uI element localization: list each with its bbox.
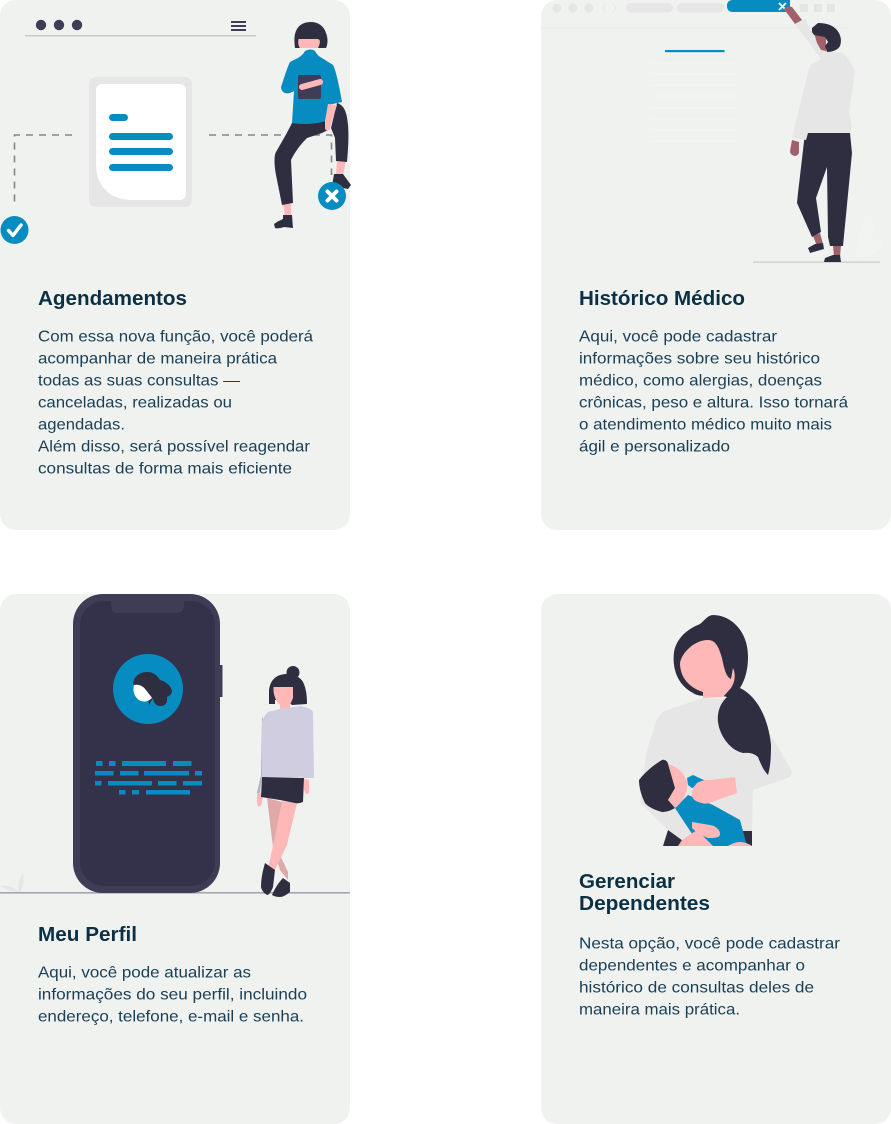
icon: cross: [318, 182, 346, 210]
browser toolbar: [25, 20, 256, 37]
text block: maneira mais prática.: [579, 1002, 740, 1018]
woman figure: [257, 666, 314, 897]
text block: Aqui, você pode cadastrar: [579, 328, 778, 346]
text block: acompanhar de maneira prática: [38, 350, 277, 368]
text block: informações do seu perfil, incluindo: [38, 986, 307, 1004]
illustration: woman with document: [0, 20, 351, 244]
faint plant: [0, 873, 24, 892]
illustration: browser and man: [541, 0, 883, 263]
panel: Gerenciar Dependentes: [541, 594, 891, 1124]
ground line: [0, 892, 350, 894]
text block: todas as suas consultas —: [38, 372, 240, 390]
icon: check: [0, 216, 28, 244]
mother hand and forearm: [692, 777, 737, 804]
dashed connector right: [209, 135, 332, 175]
sweater: [640, 695, 792, 840]
text block: histórico de consultas deles de: [579, 980, 814, 996]
text block: [579, 936, 841, 1018]
lower hand: [678, 830, 713, 846]
panel: Agendamentos: [0, 0, 351, 530]
text block: ágil e personalizado: [579, 438, 730, 456]
text block: canceladas, realizadas ou: [38, 394, 232, 412]
browser toolbar: [541, 0, 848, 29]
text block: crônicas, peso e altura. Isso tornará: [579, 394, 848, 412]
heading: Gerenciar: [579, 871, 675, 893]
text block: Nesta opção, você pode cadastrar: [579, 936, 841, 952]
illustration: phone and woman: [0, 594, 350, 897]
text block: Além disso, será possível reagendar: [38, 438, 311, 456]
text block: [38, 964, 307, 1026]
blue title bar: [665, 50, 724, 52]
icon: document: [89, 77, 192, 207]
text block: Aqui, você pode atualizar as: [38, 964, 251, 982]
ground line: [753, 262, 880, 263]
faint content lines: [650, 62, 738, 142]
panel: Meu Perfil: [0, 594, 350, 1124]
pants: [663, 830, 752, 846]
text block: consultas de forma mais eficiente: [38, 460, 292, 478]
text block: Com essa nova função, você poderá: [38, 328, 313, 346]
faint plant: [856, 215, 883, 258]
heading: Histórico Médico: [579, 288, 745, 310]
text block: [38, 328, 313, 478]
text block: [579, 328, 848, 456]
text block: médico, como alergias, doenças: [579, 372, 822, 390]
panel: Histórico Médico: [541, 0, 891, 530]
text block: endereço, telefone, e-mail e senha.: [38, 1008, 304, 1026]
avatar: [113, 654, 183, 724]
man figure: [784, 6, 855, 262]
baby: [639, 760, 752, 846]
woman figure: [274, 22, 351, 228]
dashed connector left: [14, 135, 72, 203]
illustration: mother and baby: [639, 615, 792, 846]
heading: Meu Perfil: [38, 924, 137, 946]
text block: informações sobre seu histórico: [579, 350, 820, 368]
text block: o atendimento médico muito mais: [579, 416, 832, 434]
heading: Agendamentos: [38, 288, 187, 310]
text block: agendadas.: [38, 416, 125, 434]
text placeholder lines: [95, 761, 202, 794]
mother head and hair: [674, 615, 771, 775]
text block: dependentes e acompanhar o: [579, 958, 805, 974]
heading: [579, 871, 710, 915]
phone: [73, 594, 222, 893]
heading: Dependentes: [579, 893, 710, 915]
